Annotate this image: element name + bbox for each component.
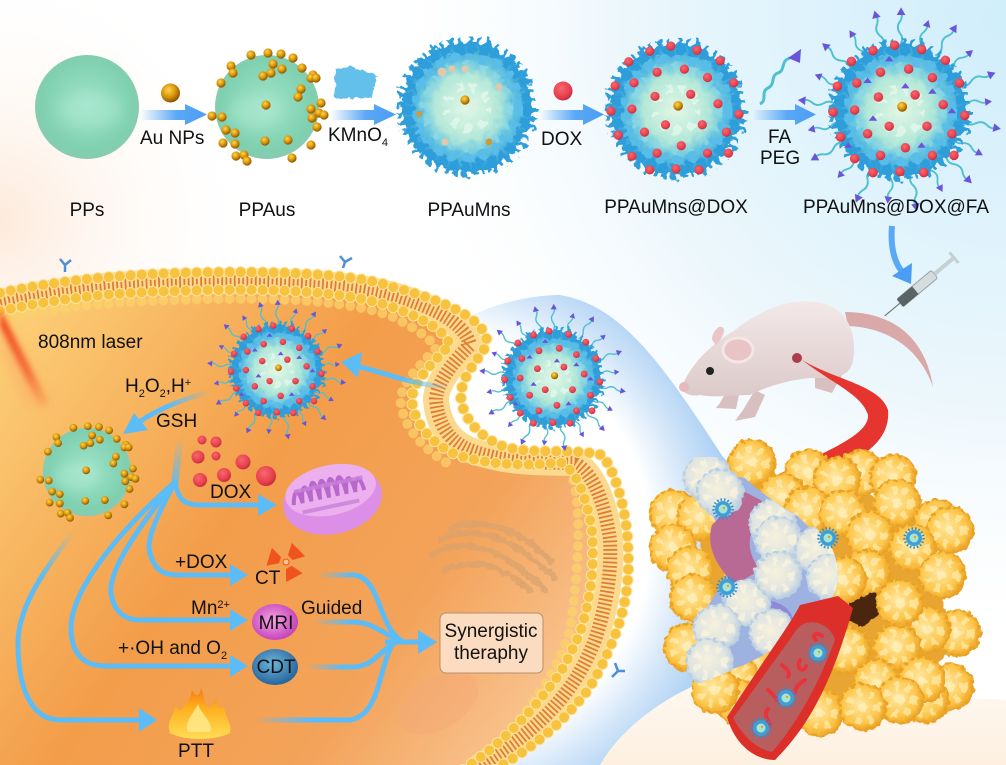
box: synergistic theraphy: theraphy (454, 643, 528, 664)
icon: KMnO4 crystal (335, 67, 377, 98)
label: Guided: Guided (301, 598, 362, 619)
label: PPAus: PPAus (239, 200, 295, 221)
zoom lens: blue wedge from cell to tumour (430, 295, 838, 765)
branch to mitochondrion (175, 482, 262, 505)
branch to CDT (71, 482, 235, 666)
branch to CT (149, 482, 235, 575)
label: +OH and O2: 2 (221, 650, 227, 662)
cell interior (0, 290, 592, 765)
icon: syringe (880, 251, 960, 321)
label: H2O2, H+: 2 (160, 388, 166, 400)
icon: radiation (266, 543, 305, 582)
label: +DOX: +DOX (175, 552, 228, 573)
label: PPAuMns@DOX@FA: PPAuMns@DOX@FA (803, 197, 989, 218)
label: +OH and O2: +·OH and O (118, 638, 221, 659)
particle: PPAuMns@DOX (606, 41, 744, 176)
branch to MRI (111, 482, 235, 620)
ear near (723, 338, 753, 362)
blood vessel ribbon (710, 360, 888, 585)
lens overlay on tumour (682, 457, 838, 683)
arrowheads (139, 494, 277, 732)
sphere: PPAus (207, 48, 329, 166)
label: PEG: PEG (760, 148, 800, 169)
tumour site (792, 353, 802, 363)
label: KMnO4: 4 (382, 137, 388, 149)
label: DOX release: DOX (210, 482, 252, 503)
arrows: merging into synergistic therapy (254, 575, 422, 720)
sphere: degraded PPAus in cell (36, 422, 139, 522)
label: H2O2, H+: + (185, 377, 191, 389)
box: synergistic theraphy: Synergistic (445, 621, 537, 642)
tumour cluster (649, 439, 981, 737)
icons: membrane receptors (60, 256, 625, 677)
label: H2O2, H+: ,H (166, 376, 185, 397)
eye (706, 367, 714, 375)
icon: gold nanoparticle (161, 84, 180, 102)
particle: PPAuMns@DOX@FA (798, 7, 1002, 212)
label: H2O2, H+: 2 (139, 388, 145, 400)
arrowhead: synergistic (418, 630, 437, 654)
box: synergistic theraphy (440, 613, 543, 673)
label: H2O2, H+: H (125, 376, 139, 397)
label: CT: CT (255, 568, 281, 589)
icon: FA-PEG ligand (760, 49, 801, 104)
arrow: injection curve (892, 226, 912, 284)
label: PPAuMns: PPAuMns (427, 200, 511, 221)
label: Mn2+: 2+ (217, 599, 230, 611)
faded organelle: golgi (432, 524, 555, 590)
cell membrane (0, 272, 628, 765)
label: H2O2, H+: O (145, 376, 160, 397)
icon: mitochondrion (276, 455, 389, 544)
particle: internalized FA particle (207, 300, 347, 440)
label: Mn2+: Mn (191, 598, 217, 619)
arrow: FA PEG step (752, 104, 816, 125)
arrows: GSH fan to therapies (18, 440, 262, 720)
particle: approaching FA particle (479, 304, 626, 452)
ear far (712, 327, 724, 345)
label: GSH: GSH (156, 411, 197, 432)
label: KMnO4: KMnO (328, 125, 382, 146)
node: CDT: CDT (256, 657, 296, 678)
label: FA: FA (768, 127, 792, 148)
laser beam (0, 309, 50, 408)
label: PTT: PTT (178, 741, 214, 762)
feet (716, 370, 842, 421)
branch to PTT (18, 532, 145, 720)
label: DOX: DOX (541, 129, 582, 150)
arrow: Au NPs step (140, 104, 207, 125)
node: MRI: MRI (259, 613, 293, 634)
particle: PPAuMns (400, 40, 534, 174)
node: MRI (252, 604, 298, 640)
label: PPs: PPs (70, 200, 104, 221)
label: Au NPs: Au NPs (140, 128, 204, 149)
label: 808nm laser: 808nm laser (38, 332, 143, 353)
icon: flame (169, 688, 230, 739)
node: CDT (252, 649, 298, 685)
arrow: endocytosis (341, 352, 450, 387)
label: PPAuMns@DOX: PPAuMns@DOX (604, 197, 748, 218)
mouse (679, 301, 933, 421)
arrow: KMnO4 step (330, 104, 396, 125)
faded organelle: mitochondrion (387, 658, 489, 748)
arrow: degradation (123, 392, 209, 434)
icon: DOX ball (554, 82, 572, 100)
sphere: PPs (35, 55, 139, 159)
tail (845, 312, 933, 387)
arrow: DOX step (540, 104, 604, 125)
icon: released DOX balls (192, 436, 276, 487)
body (682, 301, 854, 396)
panel: synthesis route (35, 7, 1002, 221)
blood vessel cutaway (727, 596, 853, 760)
icons: small nanoparticles in tumour and vessel (714, 500, 924, 738)
nose (679, 382, 689, 392)
stem (175, 440, 180, 482)
